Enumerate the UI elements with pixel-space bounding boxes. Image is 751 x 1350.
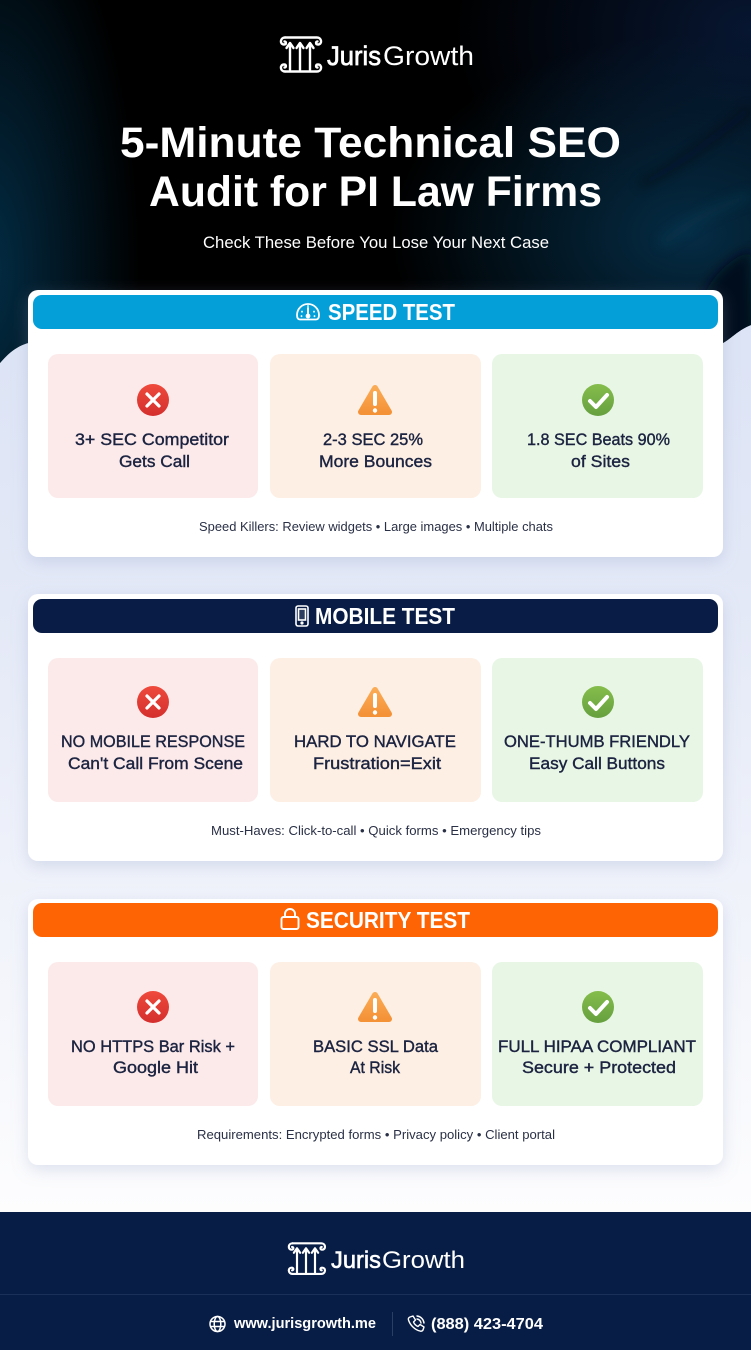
tile: 3+ sec: Gets Call [119,452,190,471]
tile: 2-3 sec: 2-3 SEC 25% [323,430,423,449]
wordmark [331,1247,465,1274]
header bar: speed test: SPEED TEST [328,299,456,325]
tile: no https: NO HTTPS Bar Risk + [71,1037,235,1056]
tile: full hipaa: FULL HIPAA COMPLIANT [498,1037,696,1056]
page background [0,0,751,1064]
phone number: (888) 423-4704 [431,1316,543,1333]
tile: one-thumb friendly: Easy Call Buttons [529,754,665,773]
icon: phone [408,1316,424,1331]
tile: no https [48,962,258,1106]
tile: no https: Google Hit [113,1058,198,1077]
tile: hard to navigate: Frustration=Exit [313,754,441,773]
tile: no mobile response: Can't Call From Scene [68,754,243,773]
icon: padlock [282,909,298,929]
tile: one-thumb friendly [492,658,703,802]
tile: 3+ sec: 3+ SEC Competitor [75,430,229,449]
logo: footer [289,1243,465,1274]
header bar: security test [33,903,718,937]
tile: 1.8 sec: 1.8 SEC Beats 90% [527,430,670,449]
wordmark: Juris [327,41,381,71]
note: speed killers: Speed Killers: Review widgets • Large images • Multiple chats [199,520,553,534]
tile: hard to navigate: HARD TO NAVIGATE [294,732,456,751]
icon: globe [210,1316,225,1332]
tile: one-thumb friendly: ONE-THUMB FRIENDLY [504,732,690,751]
wordmark: Growth [383,41,474,71]
title: Audit for PI Law Firms [149,168,602,216]
tile: 2-3 sec [270,354,481,498]
footer [0,1212,751,1350]
header bar: mobile test: MOBILE TEST [315,603,456,629]
subtitle: Check These Before You Lose Your Next Case [203,234,549,252]
icon: green check [582,384,614,416]
tile: basic ssl [270,962,481,1106]
tile: no mobile response: NO MOBILE RESPONSE [61,732,245,751]
tile: no mobile response [48,658,258,802]
header bar: speed test [33,295,718,329]
tile: 2-3 sec: More Bounces [319,452,432,471]
note: must-haves: Must-Haves: Click-to-call • Quick forms • Emergency tips [211,824,541,838]
panel: security test [28,899,723,1165]
icon: orange warning [361,995,389,1020]
website: www.jurisgrowth.me [233,1315,376,1332]
icon: column logo [289,1243,325,1274]
icon: speedometer [297,304,319,320]
icon: orange warning [361,388,389,413]
icon: column logo [281,38,321,72]
icon: red x [137,991,169,1023]
title [120,119,621,216]
title: 5-Minute Technical SEO [120,119,621,167]
logo: header [281,38,474,72]
tile: 3+ sec [48,354,258,498]
icon: green check [582,991,614,1023]
tile: full hipaa: Secure + Protected [522,1058,676,1077]
icon: phone [296,606,308,626]
tile: 1.8 sec: of Sites [571,452,630,471]
icon: red x [137,384,169,416]
icon: orange warning [361,690,389,715]
panel: speed test [28,290,723,557]
wordmark: Juris [331,1247,381,1274]
icon: green check [582,686,614,718]
tile: basic ssl: At Risk [350,1058,400,1077]
wordmark [327,41,474,71]
header bar: mobile test [33,599,718,633]
wordmark: Growth [382,1247,465,1274]
note: requirements: Requirements: Encrypted forms • Privacy policy • Client portal [197,1128,555,1142]
tile: 1.8 sec [492,354,703,498]
tile: full hipaa [492,962,703,1106]
icon: red x [137,686,169,718]
panel: mobile test [28,594,723,861]
tile: hard to navigate [270,658,481,802]
tile: basic ssl: BASIC SSL Data [313,1037,439,1056]
header bar: security test: SECURITY TEST [306,907,471,933]
